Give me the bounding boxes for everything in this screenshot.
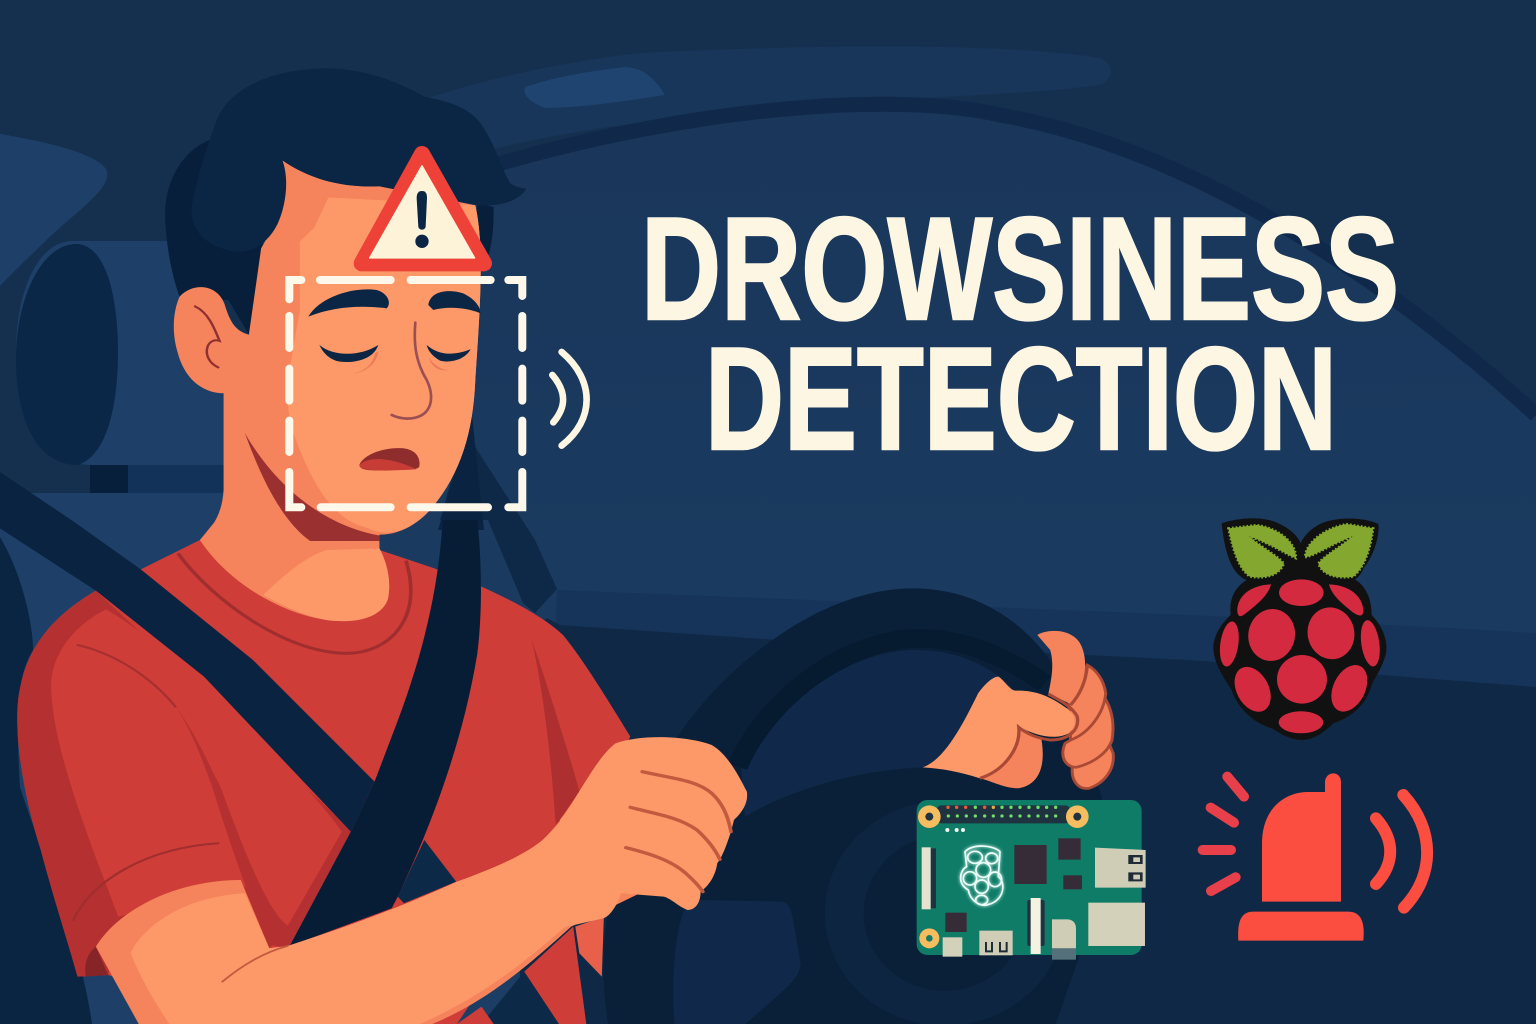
raspberry pi circuit board	[917, 800, 1146, 960]
siren body	[1262, 773, 1341, 902]
siren base	[1238, 912, 1364, 941]
back hair	[165, 140, 263, 335]
sound waves near face	[552, 352, 587, 446]
front hair	[192, 68, 526, 252]
title	[641, 187, 1399, 480]
face detection dashed frame	[289, 280, 522, 507]
chip logo	[961, 846, 1003, 905]
leaves	[1228, 524, 1373, 577]
berries	[1217, 579, 1382, 733]
driver torso and shirt	[0, 472, 630, 1024]
face	[200, 160, 481, 541]
alarm siren icon	[1203, 773, 1427, 941]
sound waves	[1376, 795, 1427, 908]
steering wheel	[603, 588, 1102, 1024]
hand gripping wheel	[923, 631, 1113, 788]
seatbelts	[0, 472, 604, 1024]
warning triangle icon	[362, 154, 484, 263]
neck	[200, 520, 389, 621]
arm and hand on wheel	[96, 737, 747, 1024]
title line 2: DETECTION	[705, 317, 1337, 480]
light rays	[1203, 777, 1244, 891]
head	[165, 68, 526, 541]
face features	[308, 289, 481, 471]
ear	[174, 287, 261, 393]
driver	[0, 68, 630, 1024]
raspberry pi logo	[1213, 518, 1386, 740]
